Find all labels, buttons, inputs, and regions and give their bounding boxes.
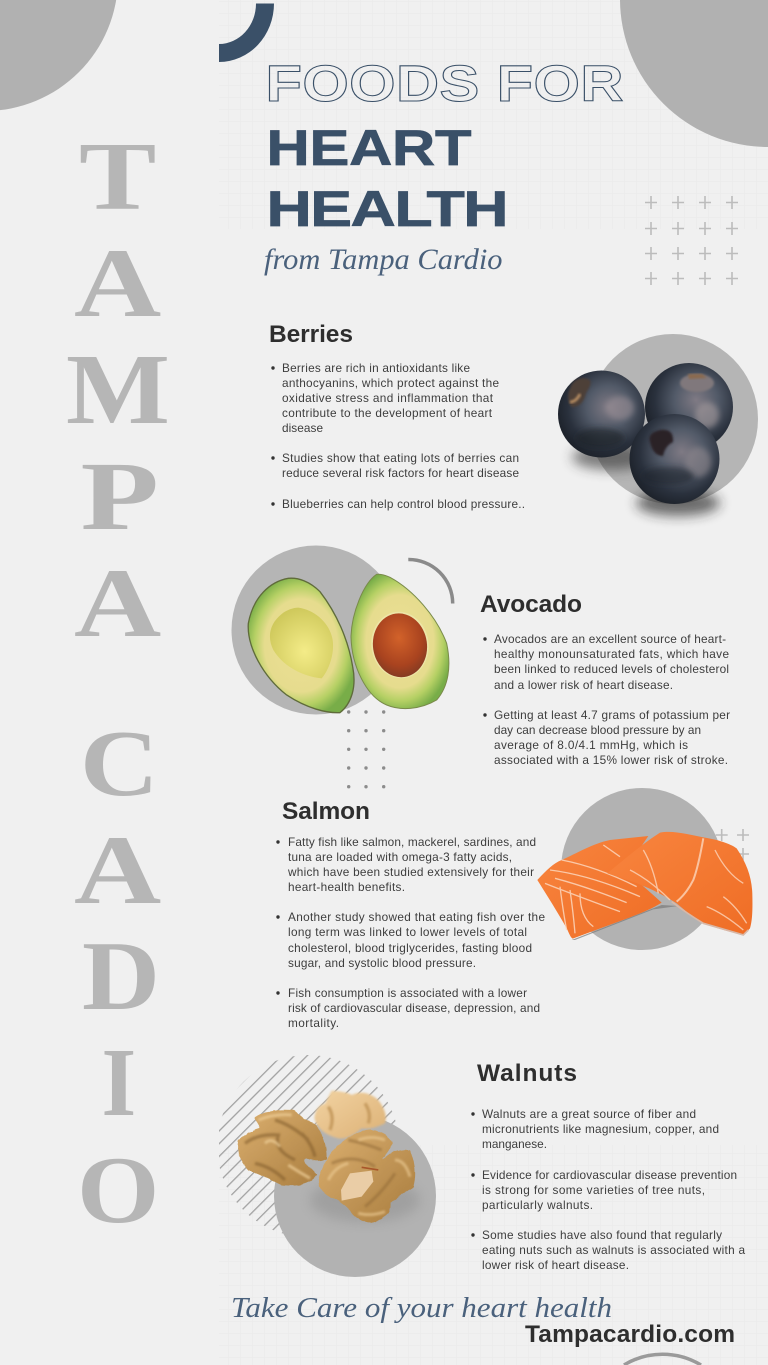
bullet list: berries: anthocyanins, which protect against the [282,376,499,390]
vertical brand lettering: Tampa Cardio: M [66,333,170,445]
vertical brand lettering: Tampa Cardio: C [80,712,159,816]
top walnut [314,1091,386,1139]
bullet list: avocado: average of 8.0/4.1 mmHg, which is [494,738,688,752]
subtitle: from Tampa Cardio [264,242,503,276]
bullet list: salmon: sugar, and systolic blood pressure. [288,956,476,970]
dot grid decoration [347,710,385,788]
decorative grey arc [408,559,453,604]
bullet list: berries [271,361,525,511]
bullet list: salmon: Another study showed that eating fish over the [288,910,545,924]
bullet list: walnuts: lower risk of heart disease. [482,1258,629,1272]
bullet list: avocado: been linked to reduced levels of cholesterol [494,662,729,676]
bullet list: berries: reduce several risk factors for heart disease [282,466,519,480]
bullet list: salmon: risk of cardiovascular disease, depression, and [288,1001,540,1015]
right walnut [318,1129,415,1223]
vertical brand lettering: Tampa Cardio: A [74,228,161,338]
panel: salmon text [276,798,545,1030]
bullet list: walnuts: eating nuts such as walnuts is associated with a [482,1243,745,1257]
bullet list: berries: Studies show that eating lots of berries can [282,451,519,465]
bullet list: salmon: which have been studied extensively for their [287,865,534,879]
left walnut [238,1109,327,1186]
bullet list: berries: contribute to the development of heart [282,406,493,420]
decorative circle top right [620,0,768,147]
bullet list: avocado: day can decrease blood pressure by an [494,723,701,737]
bullet list: avocado: healthy monounsaturated fats, which have [494,647,729,661]
vertical brand lettering: Tampa Cardio: O [77,1137,159,1243]
footer tagline: Take Care of your heart health [231,1292,612,1324]
panel: avocado text [480,591,730,767]
title: HEART [266,120,472,176]
bullet list: avocado [483,632,730,767]
bullet list: walnuts: Some studies have also found that regularly [482,1228,722,1242]
bullet list: walnuts: Evidence for cardiovascular disease prevention [482,1168,737,1182]
vertical brand lettering: Tampa Cardio: I [102,1030,136,1137]
vertical brand lettering: Tampa Cardio: P [80,441,159,550]
bullet list: salmon [276,835,545,1030]
bullet list: avocado: associated with a 15% lower risk of stroke. [494,753,728,767]
title [266,55,623,237]
decorative circle top left [0,0,118,111]
bullet list: berries: Blueberries can help control blood pressure.. [282,497,525,511]
image: blueberries [558,334,758,516]
bullet list: salmon: long term was linked to lower levels of total [288,925,527,939]
vertical brand lettering: Tampa Cardio: T [79,122,156,231]
bullet list: walnuts: manganese. [482,1137,547,1151]
bullet list: walnuts: is strong for some varieties of tree nuts, [482,1183,705,1197]
vertical brand lettering: Tampa Cardio: D [82,922,160,1031]
bullet list: salmon: cholesterol, blood triglycerides, fasting blood [288,941,532,955]
image: avocado [232,546,449,714]
bullet list: salmon: Fatty fish like salmon, mackerel, sardines, and [288,835,536,849]
panel: berries text [269,321,525,511]
bullet list: salmon: tuna are loaded with omega-3 fatty acids, [288,850,512,864]
bullet list: walnuts: micronutrients like magnesium, copper, and [482,1122,719,1136]
vertical brand lettering: Tampa Cardio [66,122,170,1243]
bullet list: salmon: mortality. [288,1016,339,1030]
title: FOODS FOR [266,55,623,112]
vertical brand lettering: Tampa Cardio: A [74,815,161,925]
bullet list: berries: Berries are rich in antioxidants like [282,361,470,375]
bullet list: walnuts: Walnuts are a great source of fiber and [482,1107,696,1121]
bullet list: avocado: Avocados are an excellent source of heart- [494,632,726,646]
bullet list: avocado: and a lower risk of heart disease. [494,678,673,692]
bullet list: avocado: Getting at least 4.7 grams of potassium per [494,708,730,722]
heading: Berries: Berries [269,321,353,348]
footer website: Tampacardio.com [525,1321,735,1348]
plus grid decoration [645,196,738,285]
image: walnuts [217,1055,436,1277]
heading: Avocado: Avocado [480,591,582,618]
heading: Salmon: Salmon [282,798,370,825]
title: HEALTH [266,182,509,237]
image: salmon [537,788,752,950]
bullet list: berries: disease [282,421,323,435]
bullet list: berries: oxidative stress and inflammation that [282,391,494,405]
bullet list: walnuts [471,1107,745,1272]
bullet list: salmon: heart-health benefits. [288,880,405,894]
bullet list: walnuts: particularly walnuts. [482,1198,593,1212]
heading: Walnuts: Walnuts [477,1060,577,1087]
bullet list: salmon: Fish consumption is associated with a lower [288,986,527,1000]
decorative navy arc [219,4,274,62]
vertical brand lettering: Tampa Cardio: A [74,548,161,658]
decorative bottom arc [624,1354,701,1365]
panel: walnuts text [471,1060,745,1272]
